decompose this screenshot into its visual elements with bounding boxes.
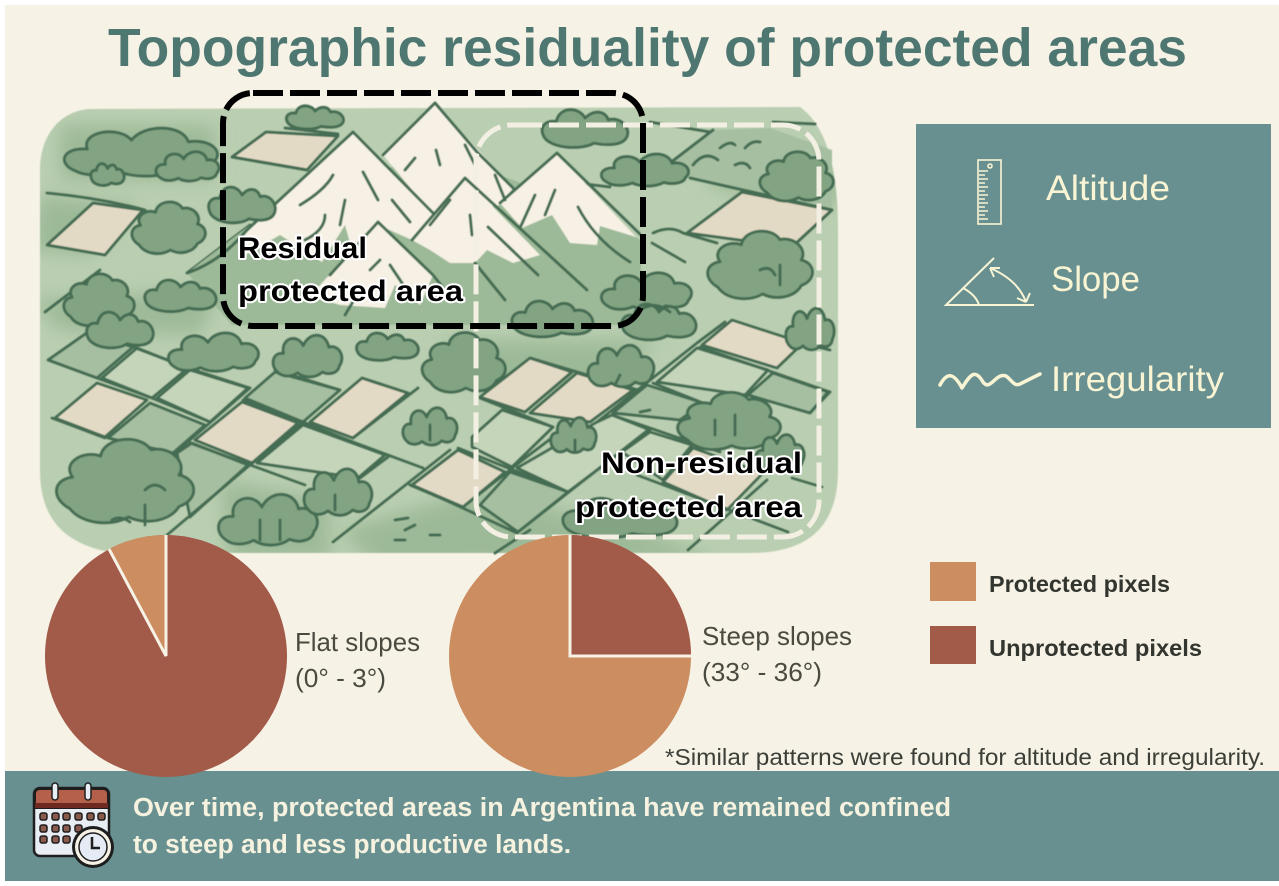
pie label: flat slopes: Flat slopes (295, 627, 420, 657)
label: residual protected area (238, 232, 463, 308)
icon: ruler (978, 160, 1001, 224)
irregularity label: Irregularity (1051, 360, 1225, 399)
map base (40, 107, 838, 553)
icon: slope angle (946, 258, 1034, 305)
legend label: unprotected: Unprotected pixels (989, 635, 1202, 661)
mountain group (187, 103, 643, 325)
band background (5, 771, 1279, 881)
panel background (916, 124, 1271, 428)
snow caps (240, 103, 636, 308)
mountain crease lines (300, 145, 555, 315)
top-right mound (670, 128, 832, 210)
panel: topographic variables (916, 124, 1271, 428)
pie chart: flat slopes (45, 535, 287, 777)
legend (930, 562, 1202, 664)
pie label: flat slopes: (0° - 3°) (295, 663, 386, 693)
field boundary lines (45, 122, 832, 553)
title: Topographic residuality of protected areas (108, 18, 1187, 78)
conclusion text: to steep and less productive lands. (133, 831, 571, 859)
label: non-residual protected area: Non-residual (601, 447, 802, 480)
pie label: steep slopes: Steep slopes (702, 621, 852, 651)
label: non-residual protected area (575, 447, 802, 524)
bush detail strokes (112, 265, 780, 540)
bottom band (5, 771, 1279, 881)
footnote: *Similar patterns were found for altitude and irregularity. (665, 744, 1265, 770)
slope label: Slope (1051, 260, 1140, 299)
map artwork (30, 103, 840, 570)
legend swatch: unprotected (930, 626, 976, 664)
legend swatch: protected (930, 562, 976, 601)
altitude label: Altitude (1046, 169, 1170, 208)
mountain ridges (187, 103, 643, 300)
farm fields (47, 132, 832, 532)
conclusion text: Over time, protected areas in Argentina have remained confined (133, 794, 951, 822)
label: non-residual protected area: protected area (575, 491, 802, 524)
bushes (56, 106, 834, 545)
pie label: steep slopes (702, 621, 852, 687)
pie label: steep slopes: (33° - 36°) (702, 657, 822, 687)
outer ridge continuation (652, 243, 685, 262)
pie chart: steep slopes (449, 535, 691, 777)
landscape illustration (30, 93, 840, 570)
residual protected area dashed outline (223, 93, 643, 326)
legend label: protected: Protected pixels (989, 571, 1170, 597)
mountain base (187, 150, 641, 325)
conclusion text (133, 794, 951, 859)
label: residual protected area: protected area (238, 275, 463, 308)
darker terrain patches (30, 125, 840, 570)
icon: calendar with clock (34, 783, 114, 868)
non-residual protected area dashed outline (476, 125, 819, 537)
label: residual protected area: Residual (238, 232, 367, 265)
icon: irregularity wave (940, 374, 1040, 388)
pie label: flat slopes (295, 627, 420, 693)
